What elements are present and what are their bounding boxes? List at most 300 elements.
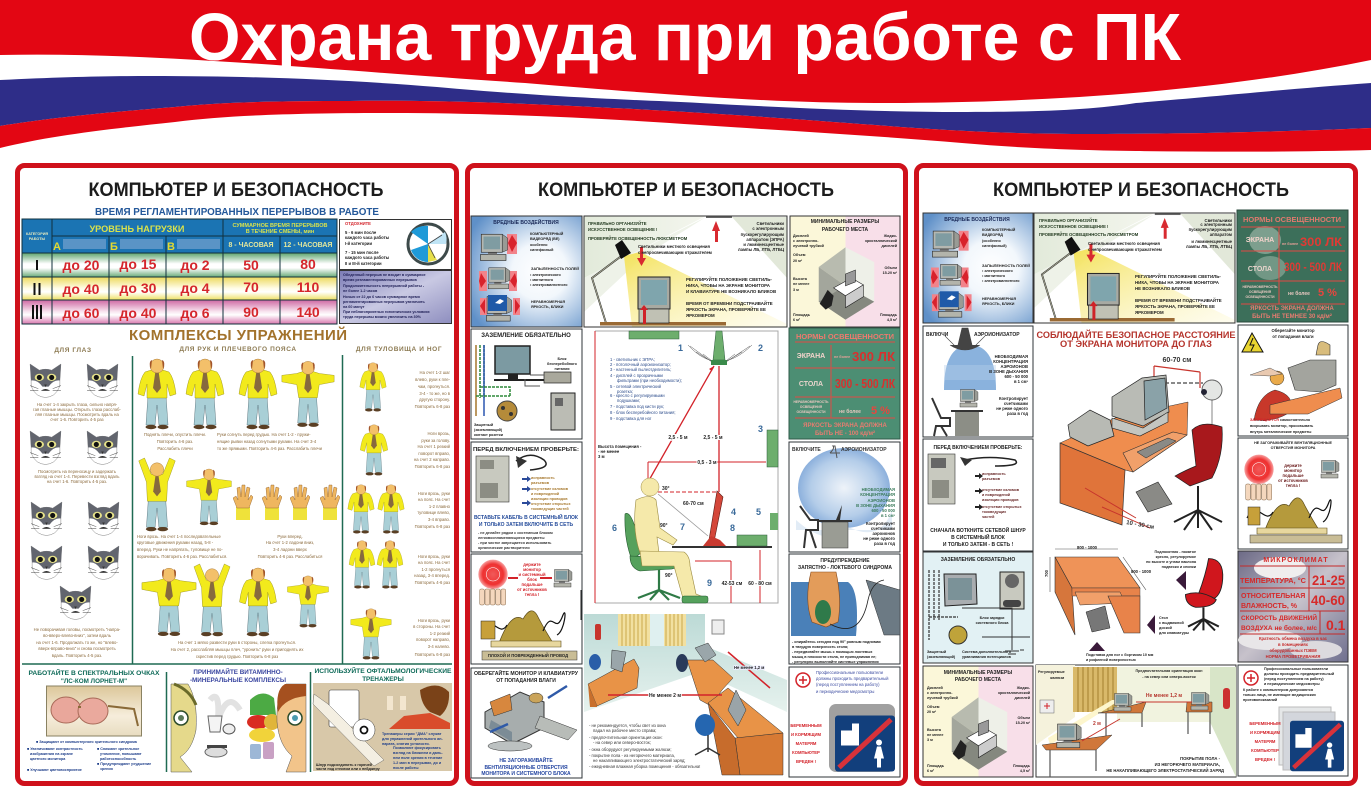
cell: professional users notice xyxy=(789,667,900,777)
cell: microclimate xyxy=(1238,551,1348,662)
cell: artificial lighting: ЯРКОСТЬ ЭКРАНА, ПРОВЕРЯЙТЕ ЕЕ xyxy=(686,307,766,312)
breaks table: 110 xyxy=(297,279,320,295)
notes box: труда перерывы можно увеличить на 30% xyxy=(343,315,422,319)
spectral glasses block: изображения на экране xyxy=(30,752,73,756)
breaks table: до 2 xyxy=(180,257,210,273)
torso and leg exercises: На счет 1 резкий xyxy=(417,444,451,449)
cell: professional users notice: БЕРЕМЕННЫМ xyxy=(790,723,822,728)
cell: artificial lighting: ЯРКОСТЬ ЭКРАНА, ПРОВЕРЯЙТЕ ЕЕ xyxy=(1135,304,1215,309)
cell: illumination norms: ОСВЕЩЕНИЯ xyxy=(800,405,823,409)
cell: artificial lighting: ВРЕМЯ ОТ ВРЕМЕНИ ПОДСТРАИВАЙТЕ xyxy=(686,301,773,306)
arm and shoulder exercises: круговые движения руками назад, 5-8 - xyxy=(137,540,214,545)
cell: aeroionizer: раза в год xyxy=(1007,411,1028,416)
torso and leg exercises: Ноги врозь, руки xyxy=(418,491,451,496)
cell: illumination norms: ОСВЕЩЕННОСТИ xyxy=(1245,295,1275,299)
cell: switch on aeroionizer: АЭРОИОНИЗАТОР xyxy=(841,447,887,453)
eye exercises: ляя глазные мышцы. Посмотреть вдаль на xyxy=(35,412,119,417)
arm and shoulder exercises: нящие рывки назад согнутыми руками. На счет 3-4 xyxy=(217,439,317,444)
cell: artificial lighting: ЯРКОМЕРОМ xyxy=(686,313,715,318)
cell: switch on aeroionizer: КОНЦЕНТРАЦИЯ xyxy=(860,492,895,497)
cell: artificial lighting: Светильники xyxy=(1205,218,1232,223)
breaks table: до 40 xyxy=(120,305,157,321)
centre diagram: correct posture: 60 - 80 см xyxy=(748,581,772,587)
cell: aeroionizer: 600 - 50 000 xyxy=(1004,374,1029,379)
panel 3: safety rules xyxy=(916,166,1356,784)
cell: harmful effects: ЯРКОСТЬ, БЛИКИ xyxy=(982,302,1015,306)
cell: medical notice: и периодические медосмотры xyxy=(1264,682,1320,686)
cell: room layout: ИЗ НЕГОРЮЧЕГО МАТЕРИАЛА, xyxy=(1155,762,1220,767)
cell: harmful effects: ВИДЕОРЯД xyxy=(982,233,1003,237)
breaks table: УРОВЕНЬ НАГРУЗКИ xyxy=(90,224,185,235)
cell: check before power on: и повреждений xyxy=(531,492,560,496)
cell: artificial lighting: пускорегулирующим xyxy=(741,232,784,237)
ophthalmic trainers block: Тренажеры серии "ДМА" служат xyxy=(382,732,442,736)
ophthalmic trainers block: ИСПОЛЬЗУЙТЕ ОФТАЛЬМОЛОГИЧЕСКИЕ xyxy=(314,666,452,675)
cell: check before power on: токоведущих xyxy=(982,510,1007,514)
cell: illumination norms: 5 % xyxy=(1318,287,1337,299)
cell: minimum workplace size: с электронно- xyxy=(927,691,953,695)
office layout illustration: - окна оборудуют регулируемыми жалюзи; xyxy=(589,747,672,752)
arm and shoulder exercises: Повторить 4-6 раз. Расслабиться xyxy=(258,554,322,559)
cell: grounding: Блок зарядки xyxy=(980,616,1005,620)
cell: medical notice: должны проходить предварительный xyxy=(1264,672,1335,676)
icon: computer xyxy=(1068,375,1169,446)
cell: artificial lighting xyxy=(584,216,787,327)
torso and leg exercises: поворот вправо, xyxy=(418,451,450,456)
centre diagram: correct posture: 30° xyxy=(662,486,670,492)
breaks table: КАТЕГОРИЯ xyxy=(26,232,48,236)
cell: keep away from moisture xyxy=(471,668,582,778)
office layout illustration: падал на рабочее место справа; xyxy=(593,728,656,733)
cell: switch on aeroionizer: счетчиками xyxy=(871,526,895,531)
cell: artificial lighting: НЕ ВОЗНИКАЛО БЛИКОВ xyxy=(1135,286,1190,291)
cell: harmful effects: • электрического xyxy=(530,273,562,277)
office layout illustration: - на север или северо-восток; xyxy=(593,740,651,745)
icon: orange desk with dimensions: 800 - 1000 xyxy=(1131,569,1152,574)
cell: aeroionizer: в 1 см³ xyxy=(1014,379,1029,384)
centre diagram: correct posture xyxy=(595,331,778,603)
spectral glasses block: ■ Увеличивают контрастность xyxy=(27,747,83,751)
icon: medical cross xyxy=(1244,671,1258,685)
cell: harmful effects: НЕРАВНОМЕРНАЯ xyxy=(531,300,565,304)
centre diagram: correct posture: 3 м xyxy=(598,454,605,459)
breaks table: 80 xyxy=(300,256,316,272)
spectral glasses block: цветного монитора xyxy=(30,757,66,761)
arm and shoulder exercises: то же прямыми. Повторить 4-6 раз. Расслабить плечи xyxy=(217,446,323,451)
cell: artificial lighting: ПРАВИЛЬНО ОРГАНИЗУЙТЕ xyxy=(1039,218,1098,223)
cell: moisture and vents: тепла ! xyxy=(1286,483,1300,488)
spectral glasses block: ■ Улучшают цветовосприятие xyxy=(27,768,82,772)
centre diagram: correct posture: 7 - подставка под кисти рук; xyxy=(610,404,664,409)
eye exercises: счет 1-6. Повторить 4-5 раз xyxy=(50,417,104,422)
cell: switch on aeroionizer: не реже одного xyxy=(863,536,895,541)
cell: illumination norms: ОСВЕЩЕННОСТИ xyxy=(796,410,826,414)
cell: artificial lighting: аппаратом (ЭПРА) xyxy=(746,237,785,242)
cell: medical notice: И КОРМЯЩИМ xyxy=(1250,730,1280,735)
cell: artificial lighting: ИСКУССТВЕННОЕ ОСВЕЩЕНИЕ ! xyxy=(1039,224,1108,229)
torso and leg exercises: на счет 2 направо. xyxy=(414,457,450,462)
cell: minimum workplace size xyxy=(790,216,900,327)
centre diagram: correct posture: 5 - сетевой электрический xyxy=(610,384,662,389)
cell: switch on aeroionizer: АЭРОИОНОВ xyxy=(868,498,895,503)
cell: professional users notice: и периодические медосмотры xyxy=(816,689,874,694)
icon: seated person xyxy=(625,478,718,603)
cell: wrist-elbow syndrome warning: в твердую поверхность стола; xyxy=(792,645,848,649)
cell: check before power on: изоляции проводов xyxy=(982,498,1019,502)
breaks table: 8 - ЧАСОВАЯ xyxy=(228,242,274,249)
safe distance illustration: по высоте и углам наклона xyxy=(1146,560,1197,564)
safe distance illustration: Стол xyxy=(1159,616,1169,620)
torso and leg exercises: Повторить 6-8 раз xyxy=(415,464,450,469)
cell: illumination norms: СТОЛА xyxy=(1248,266,1272,273)
eye exercises: вдаль. Повторить 4-5 раз. xyxy=(52,653,102,658)
centre diagram: correct posture: 2,5 - 5 м xyxy=(703,435,723,441)
spectral glasses block: ■ Предупреждают ухудшение xyxy=(97,762,151,766)
arm and shoulder exercises: На счет 1 мягко развести руки в стороны, слегка прогнуться. xyxy=(178,640,296,645)
exercises: eyes heading: ДЛЯ ГЛАЗ xyxy=(54,347,92,354)
breaks table xyxy=(22,219,337,324)
cell: medical notice: КОМПЬЮТЕР xyxy=(1251,748,1279,753)
cell: minimum workplace size: 3 м xyxy=(927,738,933,742)
cell: artificial lighting: лампы ЛБ, ЛТБ, ЛТБЦ xyxy=(738,247,785,252)
centre diagram: correct posture: 9 - подставка для ног xyxy=(610,416,652,421)
notes box: время регламентированных перерывов xyxy=(343,278,418,282)
cell: keep monitor away from radiators: держите xyxy=(523,562,541,567)
cell: aeroionizer xyxy=(923,326,1033,437)
cell: wrist-elbow syndrome warning: - передвигайте мышь с помощью локтевых xyxy=(792,650,873,654)
centre diagram: correct posture: 8 xyxy=(730,523,735,533)
breaks table: 90 xyxy=(243,304,259,320)
cell: do not open monitor xyxy=(1238,325,1348,436)
rest clock box: 7 - 15 мин после xyxy=(345,250,379,255)
cell: minimum workplace size: 4,5 м² xyxy=(887,318,898,322)
safe distance illustration: Подлокотник - покатое xyxy=(1154,550,1196,554)
breaks table: А xyxy=(53,241,61,253)
cell: minimum workplace size: не менее xyxy=(927,733,943,737)
eye exercises: на счет 1-6. Продолжать то же, но "влево- xyxy=(36,640,118,645)
cell: minimum workplace size: дисплей xyxy=(882,244,898,248)
arm and shoulder exercises: Повторить 4-6 раз. xyxy=(157,439,193,444)
cell: grounding: Блок xyxy=(557,357,567,361)
cell: room layout: жалюзи xyxy=(1049,676,1065,680)
icon: coffee and ashtray xyxy=(205,697,240,757)
cell: harmful effects xyxy=(923,213,1033,323)
cell: harmful effects: особенно xyxy=(530,243,548,247)
cell: check before power on: и повреждений xyxy=(982,493,1011,497)
cell: minimum workplace size: 4,5 м² xyxy=(1020,769,1031,773)
spectral glasses block: РАБОТАЙТЕ В СПЕКТРАЛЬНЫХ ОЧКАХ xyxy=(28,668,160,677)
cell: room layout: - на север или северо-восток xyxy=(1142,675,1196,679)
icon: glasses xyxy=(51,697,138,726)
cell: grounding xyxy=(471,329,582,439)
cell: illumination norms: НОРМЫ ОСВЕЩЕННОСТИ xyxy=(1243,215,1341,224)
cell: wrist-elbow syndrome warning: ПРЕДУПРЕЖДЕНИЕ xyxy=(820,558,870,564)
panel 3 heading: КОМПЬЮТЕР И БЕЗОПАСНОСТЬ xyxy=(993,180,1289,201)
breaks table: 50 xyxy=(243,257,259,273)
cell: wrist-elbow syndrome warning: мышц в плоскости стола, не приподнимая ее; xyxy=(792,655,876,659)
icon: person with hands xyxy=(387,685,450,729)
breaks table: до 40 xyxy=(63,281,100,297)
cell: moisture and vents: НЕ ЗАГОРАЖИВАЙТЕ ВЕНТИЛЯЦИОННЫЕ xyxy=(1254,441,1332,445)
cell: microclimate: Кратность обмена воздуха в час xyxy=(1259,636,1328,641)
vitamin complexes block: ПРИНИМАЙТЕ ВИТАМИННО- xyxy=(193,667,283,676)
arm and shoulder exercises: Поднять плечи, опустить плечи. xyxy=(144,432,206,437)
centre diagram: correct posture: 1 - светильник с ЭПРА; xyxy=(610,357,655,362)
cell: harmful effects: • магнитного xyxy=(530,278,554,282)
cell: harmful effects: ЗАПЫЛЕННОСТЬ ПОЛЕЙ xyxy=(982,264,1030,268)
ophthalmic trainers block: после работы xyxy=(393,766,419,770)
cell: grounding: (заземляющий) xyxy=(474,428,503,432)
torso and leg exercises: 1-2 резкий xyxy=(430,631,451,636)
eye exercises: Посмотреть на переносицу и задержать xyxy=(38,469,117,474)
cell: keep monitor away from radiators: блок xyxy=(527,577,538,582)
arm and shoulder exercises: Руки вперед. xyxy=(277,534,303,539)
breaks table: СУММАРНОЕ ВРЕМЯ ПЕРЕРЫВОВ xyxy=(232,223,328,229)
cell: harmful effects: синефазный xyxy=(530,248,554,252)
cell: switch on aeroionizer: 600 - 50 000 xyxy=(871,508,896,513)
centre diagram: correct posture: Высота помещения - xyxy=(598,444,642,449)
cell: grounding: Защитный xyxy=(927,650,947,654)
breaks table: 140 xyxy=(296,304,320,320)
cell: keep away from moisture: МОНИТОРА И СИСТЕМНОГО БЛОКА xyxy=(481,771,571,777)
cell: keep monitor away from radiators: монитор xyxy=(523,567,541,572)
centre diagram: correct posture: 6 xyxy=(612,523,617,533)
ophthalmic trainers block: Шнур подсоединить к горячей xyxy=(316,763,373,767)
cell: illumination norms: 300 ЛК xyxy=(1300,235,1343,249)
spectral glasses block: ■ Защищают от компьютерного зрительного синдрома xyxy=(36,740,138,744)
cell: minimum workplace size: кристаллический xyxy=(998,691,1031,695)
icon: aeroionizer xyxy=(688,331,752,365)
icon: red monitor xyxy=(703,491,726,546)
cell: minimum workplace size: Объем xyxy=(884,266,897,270)
cell: harmful effects: (особенно xyxy=(982,239,1002,243)
cell: minimum workplace size: 6 м² xyxy=(927,769,935,773)
cell: minimum workplace size: лучевой трубкой xyxy=(927,696,959,700)
cell: microclimate: в помещениях xyxy=(1278,642,1309,647)
ophthalmic trainers block: взгляд на ближнем и даль- xyxy=(393,751,443,755)
cell: harmful effects: НЕРАВНОМЕРНАЯ xyxy=(982,297,1016,301)
cell: aeroionizer: Контролирует xyxy=(999,396,1028,401)
cell: check before power on: отсутствие изломов xyxy=(982,488,1020,492)
vitamin complexes block: -МИНЕРАЛЬНЫЕ КОМПЛЕКСЫ xyxy=(190,677,286,684)
cell: illumination norms: СТОЛА xyxy=(799,381,823,388)
breaks table: В xyxy=(167,241,175,253)
torso and leg exercises: Повторить 6-8 раз xyxy=(415,524,450,529)
cell: keep monitor away from radiators: от источников xyxy=(517,587,547,592)
cell: moisture and vents: ОТВЕРСТИЯ МОНИТОРА xyxy=(1271,446,1316,450)
cell: grounding: системного блока xyxy=(976,621,1009,625)
icon: eye xyxy=(1201,380,1222,430)
centre diagram: correct posture: фильтрами (при необходимости); xyxy=(617,378,682,383)
arm and shoulder exercises: 3-4 ладони вверх xyxy=(273,547,308,552)
cell: artificial lighting: с непросвечивающим отражателем xyxy=(1088,247,1162,252)
cell: professional users notice: должны проходить предварительный xyxy=(816,676,889,681)
cell: switch on aeroionizer: аэроионов xyxy=(872,531,895,536)
cell: harmful effects: • магнитного xyxy=(982,274,1006,278)
cell: check before power on: исправность xyxy=(982,472,1006,476)
safe distance illustration: доской xyxy=(1159,626,1173,630)
breaks heading: ВРЕМЯ РЕГЛАМЕНТИРОВАННЫХ ПЕРЕРЫВОВ В РАБОТЕ xyxy=(95,206,379,218)
rest clock box xyxy=(340,220,452,270)
cell: harmful effects: ВИДЕОРЯД (ВЕ) xyxy=(530,237,560,241)
cell: minimum workplace size: Объем xyxy=(927,705,940,709)
cell: illumination norms: не более xyxy=(1282,242,1298,246)
cell: minimum workplace size: МИНИМАЛЬНЫЕ РАЗМЕРЫ xyxy=(811,219,879,225)
cell: check before power on: В СИСТЕМНЫЙ БЛОК xyxy=(951,533,1006,541)
exercises: arms heading: ДЛЯ РУК И ПЛЕЧЕВОГО ПОЯСА xyxy=(179,346,297,353)
centre diagram: correct posture: 90° xyxy=(665,573,673,579)
centre diagram: correct posture: 2 xyxy=(758,343,763,353)
notes box: Обеденный перерыв не входит в суммарное xyxy=(343,273,426,277)
torso and leg exercises: Повторить 6-8 раз xyxy=(415,652,450,657)
safe distance illustration: кресло, регулируемое xyxy=(1156,555,1196,559)
main title: Охрана труда при работе с ПК xyxy=(189,0,1181,75)
cell: harmful effects: КОМПЬЮТЕРНЫЙ xyxy=(982,228,1016,232)
panel 1: schedule and exercises xyxy=(18,166,456,784)
cell: artificial lighting: аппаратом xyxy=(1210,232,1232,237)
icon: healthy face xyxy=(277,684,306,772)
cell: microclimate: ОТНОСИТЕЛЬНАЯ xyxy=(1241,593,1305,600)
arm and shoulder exercises: Руки согнуть перед грудью. На счет 1-2 - пружи- xyxy=(217,432,311,437)
spectral glasses block: зрения xyxy=(100,767,113,771)
torso and leg exercises: на пояс. На счет xyxy=(418,560,450,565)
cell: artificial lighting: Светильники местного освещения xyxy=(638,244,711,249)
cell: minimum workplace size: Высота xyxy=(793,277,808,281)
cell: harmful effects: синефазный) xyxy=(982,244,1007,248)
cell: medical notice: Профессиональные пользователи xyxy=(1264,667,1329,671)
breaks table: до 30 xyxy=(120,280,157,296)
cell: wrist-elbow syndrome warning: - опирайтесь сегодня под 90° ровным поднимая xyxy=(792,640,881,644)
safe distance illustration: ОТ ЭКРАНА МОНИТОРА ДО ГЛАЗ xyxy=(1060,339,1212,350)
cell: microclimate: оборудованных ПЭВМ xyxy=(1269,648,1317,653)
notes box: на 60 минут xyxy=(343,305,365,309)
ophthalmic trainers block: 1-2 мин в перерывах, до и xyxy=(393,761,442,765)
cell: artificial lighting: Светильники местного освещения xyxy=(1088,241,1161,246)
cell: harmful effects: ВРЕДНЫЕ ВОЗДЕЙСТВИЯ xyxy=(493,218,559,226)
torso and leg exercises: На счет 1-2 шаг xyxy=(420,370,450,375)
cell: switch on aeroionizer: в 1 см³ xyxy=(881,513,896,518)
cell: microclimate: 21-25 xyxy=(1312,572,1345,588)
office layout illustration xyxy=(584,614,787,778)
safe distance illustration: Подставка для ног с бортиком 10 мм xyxy=(1086,653,1154,657)
cell: switch on aeroionizer: В ЗОНЕ ДЫХАНИЯ xyxy=(856,503,895,508)
safe distance illustration: 60-70 см xyxy=(1163,357,1191,364)
torso and leg exercises: чам, прогнуться. xyxy=(418,384,450,389)
torso and leg exercises: на пояс. На счет xyxy=(418,497,450,502)
cell: minimum workplace size: Объем xyxy=(793,253,806,257)
cell: room layout: Регулируемые xyxy=(1038,670,1065,674)
cell: artificial lighting: с электронным xyxy=(1200,222,1232,227)
cell: medical notice: К работе с компьютером допускаются xyxy=(1243,688,1313,692)
cell: harmful effects: • электромагнитного xyxy=(530,283,568,287)
office layout illustration: - покрытие пола - из негорючего материала, xyxy=(589,753,675,758)
cell: wrist-elbow syndrome warning: ЗАПЯСТНО - ЛОКТЕВОГО СИНДРОМА xyxy=(798,565,892,571)
panel 2 heading: КОМПЬЮТЕР И БЕЗОПАСНОСТЬ xyxy=(538,180,834,201)
cell: minimum workplace size: Площадь xyxy=(880,313,898,317)
breaks table: до 20 xyxy=(63,257,100,273)
cell: grounding: бесперебойного xyxy=(547,362,578,366)
cell: check before power on: И ТОЛЬКО ЗАТЕМ ВКЛЮЧИТЕ В СЕТЬ xyxy=(479,522,574,528)
cell: switch on aeroionizer: Контролирует xyxy=(866,521,895,526)
breaks table: 70 xyxy=(243,279,259,295)
ophthalmic trainers block: нем поле зрения в течение xyxy=(393,756,442,760)
cell: moisture and vents: монитор xyxy=(1284,468,1302,473)
cell: illumination norms: 300 - 500 ЛК xyxy=(1284,260,1343,274)
cell: minimum workplace size: Высота xyxy=(927,728,942,732)
torso and leg exercises: Повторить 6-8 раз xyxy=(415,404,450,409)
icon: orange desk with dimensions: 700 xyxy=(1044,569,1049,577)
safe distance illustration: СОБЛЮДАЙТЕ БЕЗОПАСНОЕ РАССТОЯНИЕ xyxy=(1036,329,1236,341)
cell: harmful effects: ЯРКОСТЬ, БЛИКИ xyxy=(531,305,564,309)
cell: illumination norms: НЕРАВНОМЕРНОСТЬ xyxy=(1243,285,1278,289)
centre diagram: correct posture: 9 xyxy=(707,578,712,588)
cell: check before power on: ВСТАВЬТЕ КАБЕЛЬ В СИСТЕМНЫЙ БЛОК xyxy=(474,513,579,521)
cell: medical notice: ВРЕДЕН ! xyxy=(1255,757,1275,762)
cell: illumination norms: ЯРКОСТЬ ЭКРАНА ДОЛЖНА xyxy=(803,423,887,429)
cell: keep monitor away from radiators: тепла ! xyxy=(525,592,539,597)
cell: artificial lighting: ЯРКОМЕРОМ xyxy=(1135,310,1164,315)
cell: check before power on: токоведущих частей xyxy=(531,507,569,511)
cell: check before power on: И ТОЛЬКО ЗАТЕМ - В СЕТЬ ! xyxy=(943,542,1013,548)
centre diagram: correct posture: 6 - кресло с регулируемыми xyxy=(610,393,665,398)
cell: minimum workplace size: Жидко- xyxy=(883,234,898,238)
cell: artificial lighting xyxy=(1034,213,1235,323)
cell: check before power on: отсутствие открытых xyxy=(531,502,571,506)
cell: artificial lighting: и люминесцентные xyxy=(1191,239,1233,244)
cell: aeroionizer: АЭРОИОНОВ xyxy=(1001,364,1028,369)
cell: keep away from moisture: ОБЕРЕГАЙТЕ МОНИТОР И КЛАВИАТУРУ xyxy=(474,669,579,677)
cell: room layout: Не менее 1,2 м xyxy=(1146,693,1182,699)
cell: minimum workplace size: лучевой трубкой xyxy=(793,244,825,248)
rest clock box: II и III-й категории xyxy=(345,261,382,266)
cell: check before power on: ПЕРЕД ВКЛЮЧЕНИЕМ ПРОВЕРЬТЕ: xyxy=(934,445,1023,451)
cell: minimum workplace size: Площадь xyxy=(927,764,945,768)
breaks table: Б xyxy=(110,241,118,253)
cell: keep away from moisture: ВЕНТИЛЯЦИОННЫЕ ОТВЕРСТИЯ xyxy=(484,765,568,771)
cell: room layout xyxy=(1036,665,1236,777)
cell: grounding: контакт розетки xyxy=(474,433,504,437)
notes box: Продолжительность непрерывной работы - xyxy=(343,284,425,288)
cell: harmful effects: • электромагнитного xyxy=(982,279,1020,283)
cell: switch on aeroionizer: ВКЛЮЧИТЕ xyxy=(792,447,821,453)
cell: grounding: ЗАЗЕМЛЕНИЕ ОБЯЗАТЕЛЬНО xyxy=(941,557,1015,563)
centre diagram: correct posture: - не менее xyxy=(598,449,620,454)
cell: check before power on: частей xyxy=(982,515,995,519)
panel 2: workplace organisation xyxy=(468,166,906,784)
cell: artificial lighting: РЕГУЛИРУЙТЕ ПОЛОЖЕНИЕ СВЕТИЛЬ- xyxy=(1135,274,1221,279)
arm and shoulder exercises: Расслабить плечи xyxy=(157,446,193,451)
cell: minimum workplace size: Дисплей xyxy=(927,686,944,690)
cell: artificial lighting: И КЛАВИАТУРЕ НЕ ВОЗНИКАЛО БЛИКОВ xyxy=(686,289,776,294)
cell: minimum workplace size: не менее xyxy=(793,282,809,286)
cell: illumination norms: не более xyxy=(1288,290,1310,297)
torso and leg exercises: влево, руки к пле- xyxy=(415,377,451,382)
cell: switch on aeroionizer: раза в год xyxy=(874,541,895,546)
safe distance illustration: с выдвижной xyxy=(1159,621,1184,625)
breaks table: 12 - ЧАСОВАЯ xyxy=(284,242,332,249)
rest clock box: ОТДОХНИТЕ xyxy=(345,221,371,226)
icon: orange desk with dimensions xyxy=(1044,545,1152,635)
cell: microclimate: СКОРОСТЬ ДВИЖЕНИЙ xyxy=(1241,613,1317,622)
icon: orange desk with dimensions: 800 - 1000 xyxy=(1077,545,1098,550)
cell: illumination norms: БЫТЬ НЕ - 100 кд/м² xyxy=(815,430,875,437)
centre diagram: correct posture: розетка; xyxy=(617,389,633,394)
breaks table: РАБОТЫ xyxy=(29,237,45,241)
safe distance illustration: 10 - 30 см xyxy=(1126,520,1155,531)
cell: minimum workplace size: дисплей xyxy=(1014,696,1031,700)
cell: illumination norms xyxy=(789,328,900,439)
cell: check before power on: - не делайте рядом с системным блоком xyxy=(478,531,553,535)
